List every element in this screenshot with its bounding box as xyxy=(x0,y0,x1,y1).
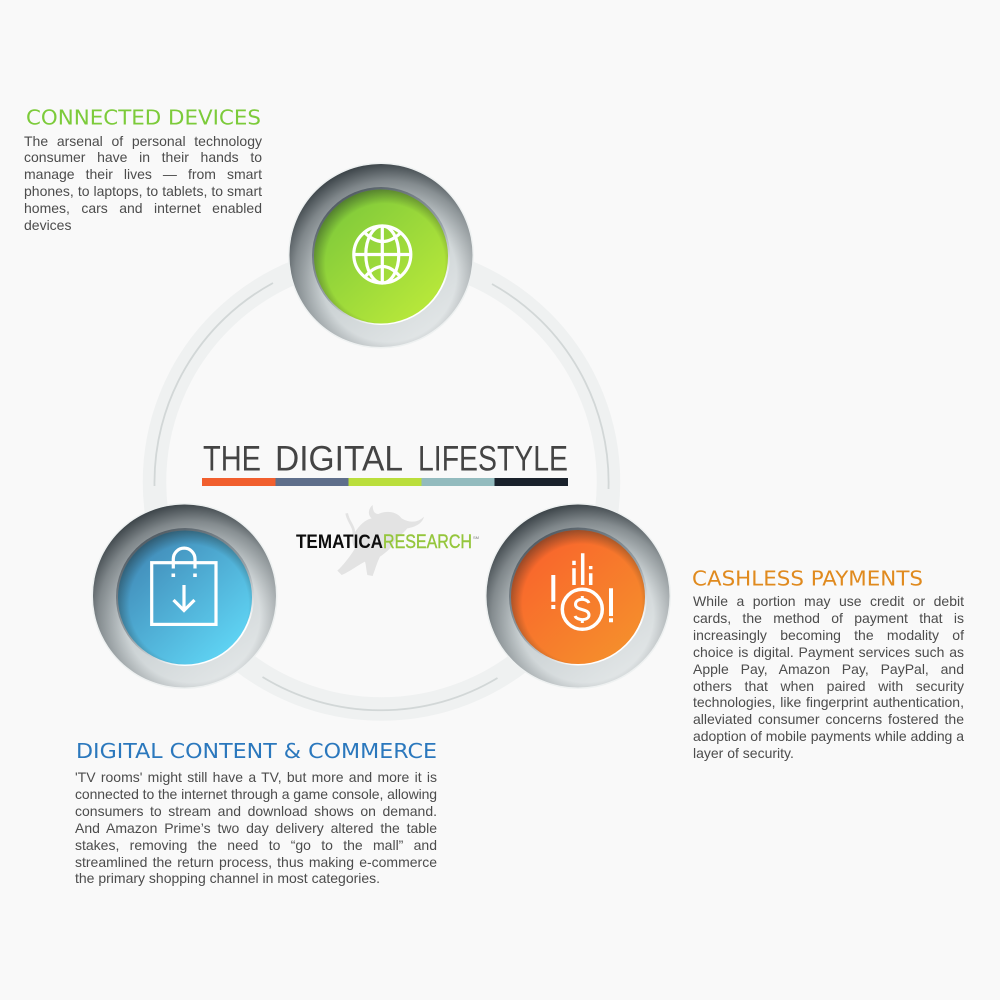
logo: Tematica Research: RESEARCH xyxy=(383,531,472,553)
text block: cashless payments: cards, the method of payment that is xyxy=(693,610,964,626)
text block: digital content and commerce: the primary shopping channel in most categories. xyxy=(75,870,380,886)
text block: digital content and commerce xyxy=(75,769,437,886)
text block: cashless payments: layer of security. xyxy=(693,745,794,761)
icon disc: cashless payments (orange) xyxy=(485,503,671,689)
title xyxy=(203,440,568,478)
text block: digital content and commerce: And Amazon Prime’s two day delivery altered the table xyxy=(75,820,437,836)
heading: cashless payments: CASHLESS PAYMENTS xyxy=(692,566,923,590)
icon disc: digital content and commerce (blue) xyxy=(92,503,278,689)
logo: Tematica Research: SM xyxy=(473,535,479,540)
title: DIGITAL xyxy=(275,440,403,478)
text block: digital content and commerce: streamlined the return process, thus making e-commerce xyxy=(75,854,437,870)
text block: digital content and commerce: consumers to stream and download shows on demand. xyxy=(75,803,437,819)
text block: connected devices: The arsenal of personal technology xyxy=(24,132,262,148)
text block: digital content and commerce: stakes, removing the need to “go to the mall” and xyxy=(75,837,437,853)
text block: connected devices xyxy=(24,132,262,233)
heading: digital content and commerce: DIGITAL CONTENT & COMMERCE xyxy=(76,739,437,763)
thin arc: top left xyxy=(154,283,273,486)
text block: digital content and commerce: 'TV rooms' might still have a TV, but more and more it is xyxy=(75,769,437,785)
text block: cashless payments xyxy=(693,593,964,761)
text block: connected devices: manage their lives — from smart xyxy=(24,166,262,182)
title: LIFESTYLE xyxy=(418,440,568,478)
text block: cashless payments: increasingly becoming the modality of xyxy=(693,627,964,643)
text block: cashless payments: technologies, like fingerprint authentication, xyxy=(693,694,964,710)
text block: cashless payments: others that when paired with security xyxy=(693,678,964,694)
icon: shopping bag with down arrow xyxy=(152,548,216,624)
text block: cashless payments: Apple Pay, Amazon Pay, PayPal, and xyxy=(693,661,964,677)
text block: cashless payments: While a portion may use credit or debit xyxy=(693,593,964,609)
thin arc: top right xyxy=(492,284,609,489)
thin arc: bottom xyxy=(262,677,498,710)
icon: faint bull watermark xyxy=(337,505,424,576)
text block: connected devices: phones, to laptops, to tablets, to smart xyxy=(24,183,262,199)
text block: cashless payments: alleviated consumer concerns fostered the xyxy=(693,711,964,727)
title: THE xyxy=(203,440,261,478)
icon: falling dollar coin xyxy=(553,553,611,629)
icon: globe xyxy=(354,226,411,283)
logo: Tematica Research xyxy=(296,531,479,553)
text block: cashless payments: choice is digital. Payment services such as xyxy=(693,644,964,660)
text block: cashless payments: adoption of mobile payments while adding a xyxy=(693,728,964,744)
logo: Tematica Research: TEMATICA xyxy=(296,531,383,553)
ring connecting the three circles xyxy=(154,255,609,710)
icon disc: connected devices (green) xyxy=(288,162,474,348)
text block: connected devices: homes, cars and internet enabled xyxy=(24,200,262,216)
heading: connected devices: CONNECTED DEVICES xyxy=(26,106,261,130)
colour bar under title xyxy=(202,478,568,486)
text block: digital content and commerce: connected to the internet through a game console, allowing xyxy=(75,786,437,802)
text block: connected devices: consumer have in their hands to xyxy=(24,149,262,165)
text block: connected devices: devices xyxy=(24,217,71,233)
